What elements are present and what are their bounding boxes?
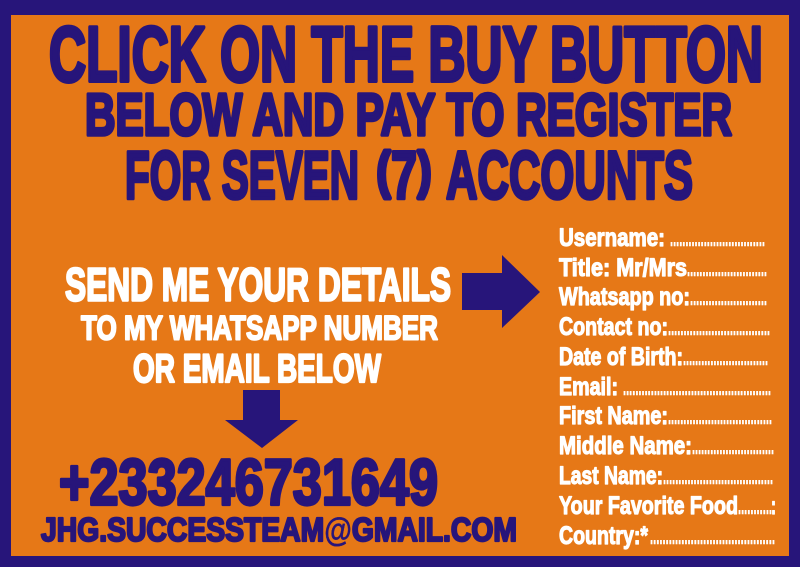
field: country: Country:* bbox=[559, 522, 648, 550]
field: date of birth: Date of Birth: bbox=[559, 343, 683, 371]
heading line 3: 7 bbox=[391, 138, 417, 214]
instruction line 3: OR EMAIL BELOW bbox=[133, 347, 381, 391]
email address: JHG.SUCCESSTEAM@GMAIL.COM bbox=[41, 511, 517, 548]
instruction text bbox=[65, 258, 451, 391]
heading bbox=[49, 10, 763, 214]
heading line 3: ) bbox=[418, 142, 431, 198]
heading line 3: FOR SEVEN bbox=[125, 138, 359, 214]
field: middle name: Middle Name: bbox=[559, 432, 692, 460]
instruction line 2: TO MY WHATSAPP NUMBER bbox=[81, 310, 438, 348]
field: username: Username: bbox=[559, 224, 665, 252]
heading line 3: ( bbox=[377, 142, 390, 198]
field: contact: Contact no: bbox=[559, 313, 668, 341]
arrow: right bbox=[462, 255, 540, 328]
field: favorite food: Your Favorite Food bbox=[559, 492, 738, 520]
instruction line 1: SEND ME YOUR DETAILS bbox=[65, 258, 451, 310]
field: favorite food: : bbox=[771, 492, 776, 520]
registration details form bbox=[559, 224, 776, 550]
field: last name: Last Name: bbox=[559, 462, 663, 490]
field: email: Email: bbox=[559, 373, 618, 401]
field: first name: First Name: bbox=[559, 402, 668, 430]
field: title: Title: Mr/Mrs bbox=[559, 254, 687, 282]
field: whatsapp: Whatsapp no: bbox=[559, 283, 690, 311]
phone number: +233246731649 bbox=[59, 446, 438, 518]
arrow: down bbox=[225, 390, 298, 448]
